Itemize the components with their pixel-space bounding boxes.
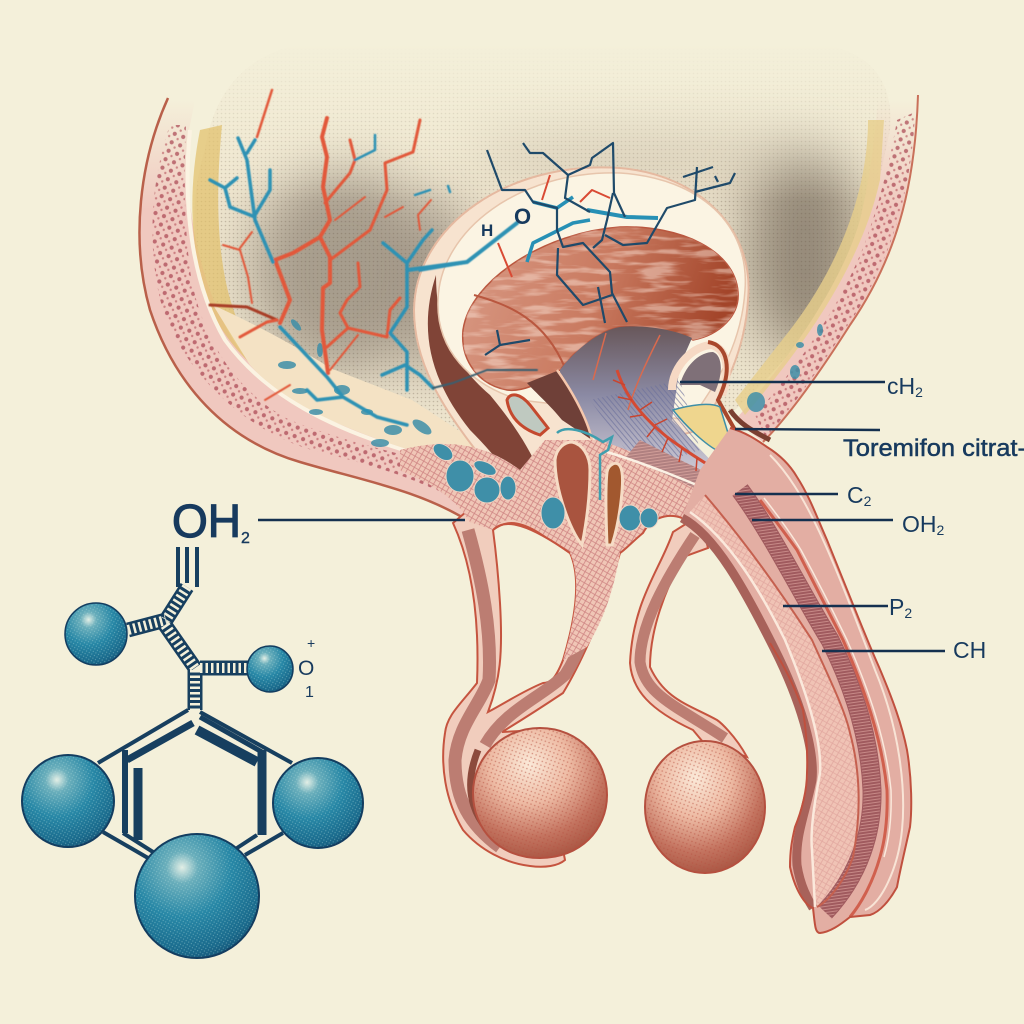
left tissue layer with blue spots	[213, 305, 535, 480]
dark fold	[527, 371, 592, 440]
muscle columns	[555, 442, 590, 545]
right arch	[672, 345, 727, 395]
right pelvic wall	[735, 95, 918, 442]
dark striped band	[740, 490, 872, 912]
left pelvic wall	[140, 98, 535, 522]
bladder muscle wall	[463, 227, 738, 390]
testis left	[473, 728, 607, 858]
small atom labels	[298, 635, 315, 701]
left vas tube and scrotal pouch	[443, 500, 640, 867]
right vas tube	[630, 515, 747, 757]
left arch	[507, 395, 548, 435]
right yellow fat layer	[735, 120, 884, 415]
atom large left	[22, 755, 114, 847]
formula atom O: O	[514, 204, 531, 229]
ball-and-stick molecule	[22, 547, 363, 958]
inner light chamber	[690, 495, 859, 907]
blue veins	[210, 135, 517, 425]
label CH2: 2	[915, 384, 923, 400]
penis shaft cross-section	[682, 428, 911, 933]
label CH2: cH	[887, 373, 915, 399]
fan of nerve and blue strands	[625, 440, 750, 510]
label OH2 right: 2	[936, 522, 944, 538]
label OH2 right: OH	[902, 511, 936, 537]
small atom labels: O	[298, 657, 314, 680]
dark connector strand	[433, 370, 537, 388]
red arteries	[210, 90, 431, 400]
dark crescent	[428, 275, 540, 488]
label P2: P	[889, 594, 904, 620]
testis right	[645, 741, 765, 873]
ring bonds	[98, 710, 292, 858]
small atom labels: +	[307, 635, 315, 651]
cavity under bladder	[560, 326, 720, 480]
shaft outer edge	[730, 428, 911, 933]
formula atom H: H	[481, 221, 493, 240]
label C2: C	[847, 482, 864, 508]
atom small left	[65, 603, 127, 665]
triple bond	[178, 547, 197, 587]
left yellow fat layer	[192, 125, 430, 450]
label CH: CH	[953, 637, 986, 663]
urogenital tissue mass	[400, 370, 770, 660]
blue glands	[430, 440, 658, 531]
atom large right	[273, 758, 363, 848]
leader lines	[258, 382, 945, 651]
skeletal formula over bladder	[485, 143, 735, 355]
small atom labels: 1	[305, 684, 314, 701]
bladder	[414, 167, 749, 488]
white lining	[438, 173, 745, 420]
left dark stippled band	[682, 518, 813, 908]
label Toremifon citrate: Toremifon citrat-	[843, 435, 1024, 462]
atom large bottom	[135, 834, 259, 958]
hatched bonds	[128, 587, 248, 710]
label C2: 2	[864, 493, 872, 509]
blood vessels	[210, 90, 537, 425]
label OH2 molecule: 2	[241, 530, 250, 547]
outer bladder rings	[414, 167, 749, 480]
label OH2 molecule: OH	[172, 495, 241, 547]
dome cavity with shading	[196, 69, 890, 432]
atom small right	[247, 646, 293, 692]
label P2: 2	[904, 605, 912, 621]
